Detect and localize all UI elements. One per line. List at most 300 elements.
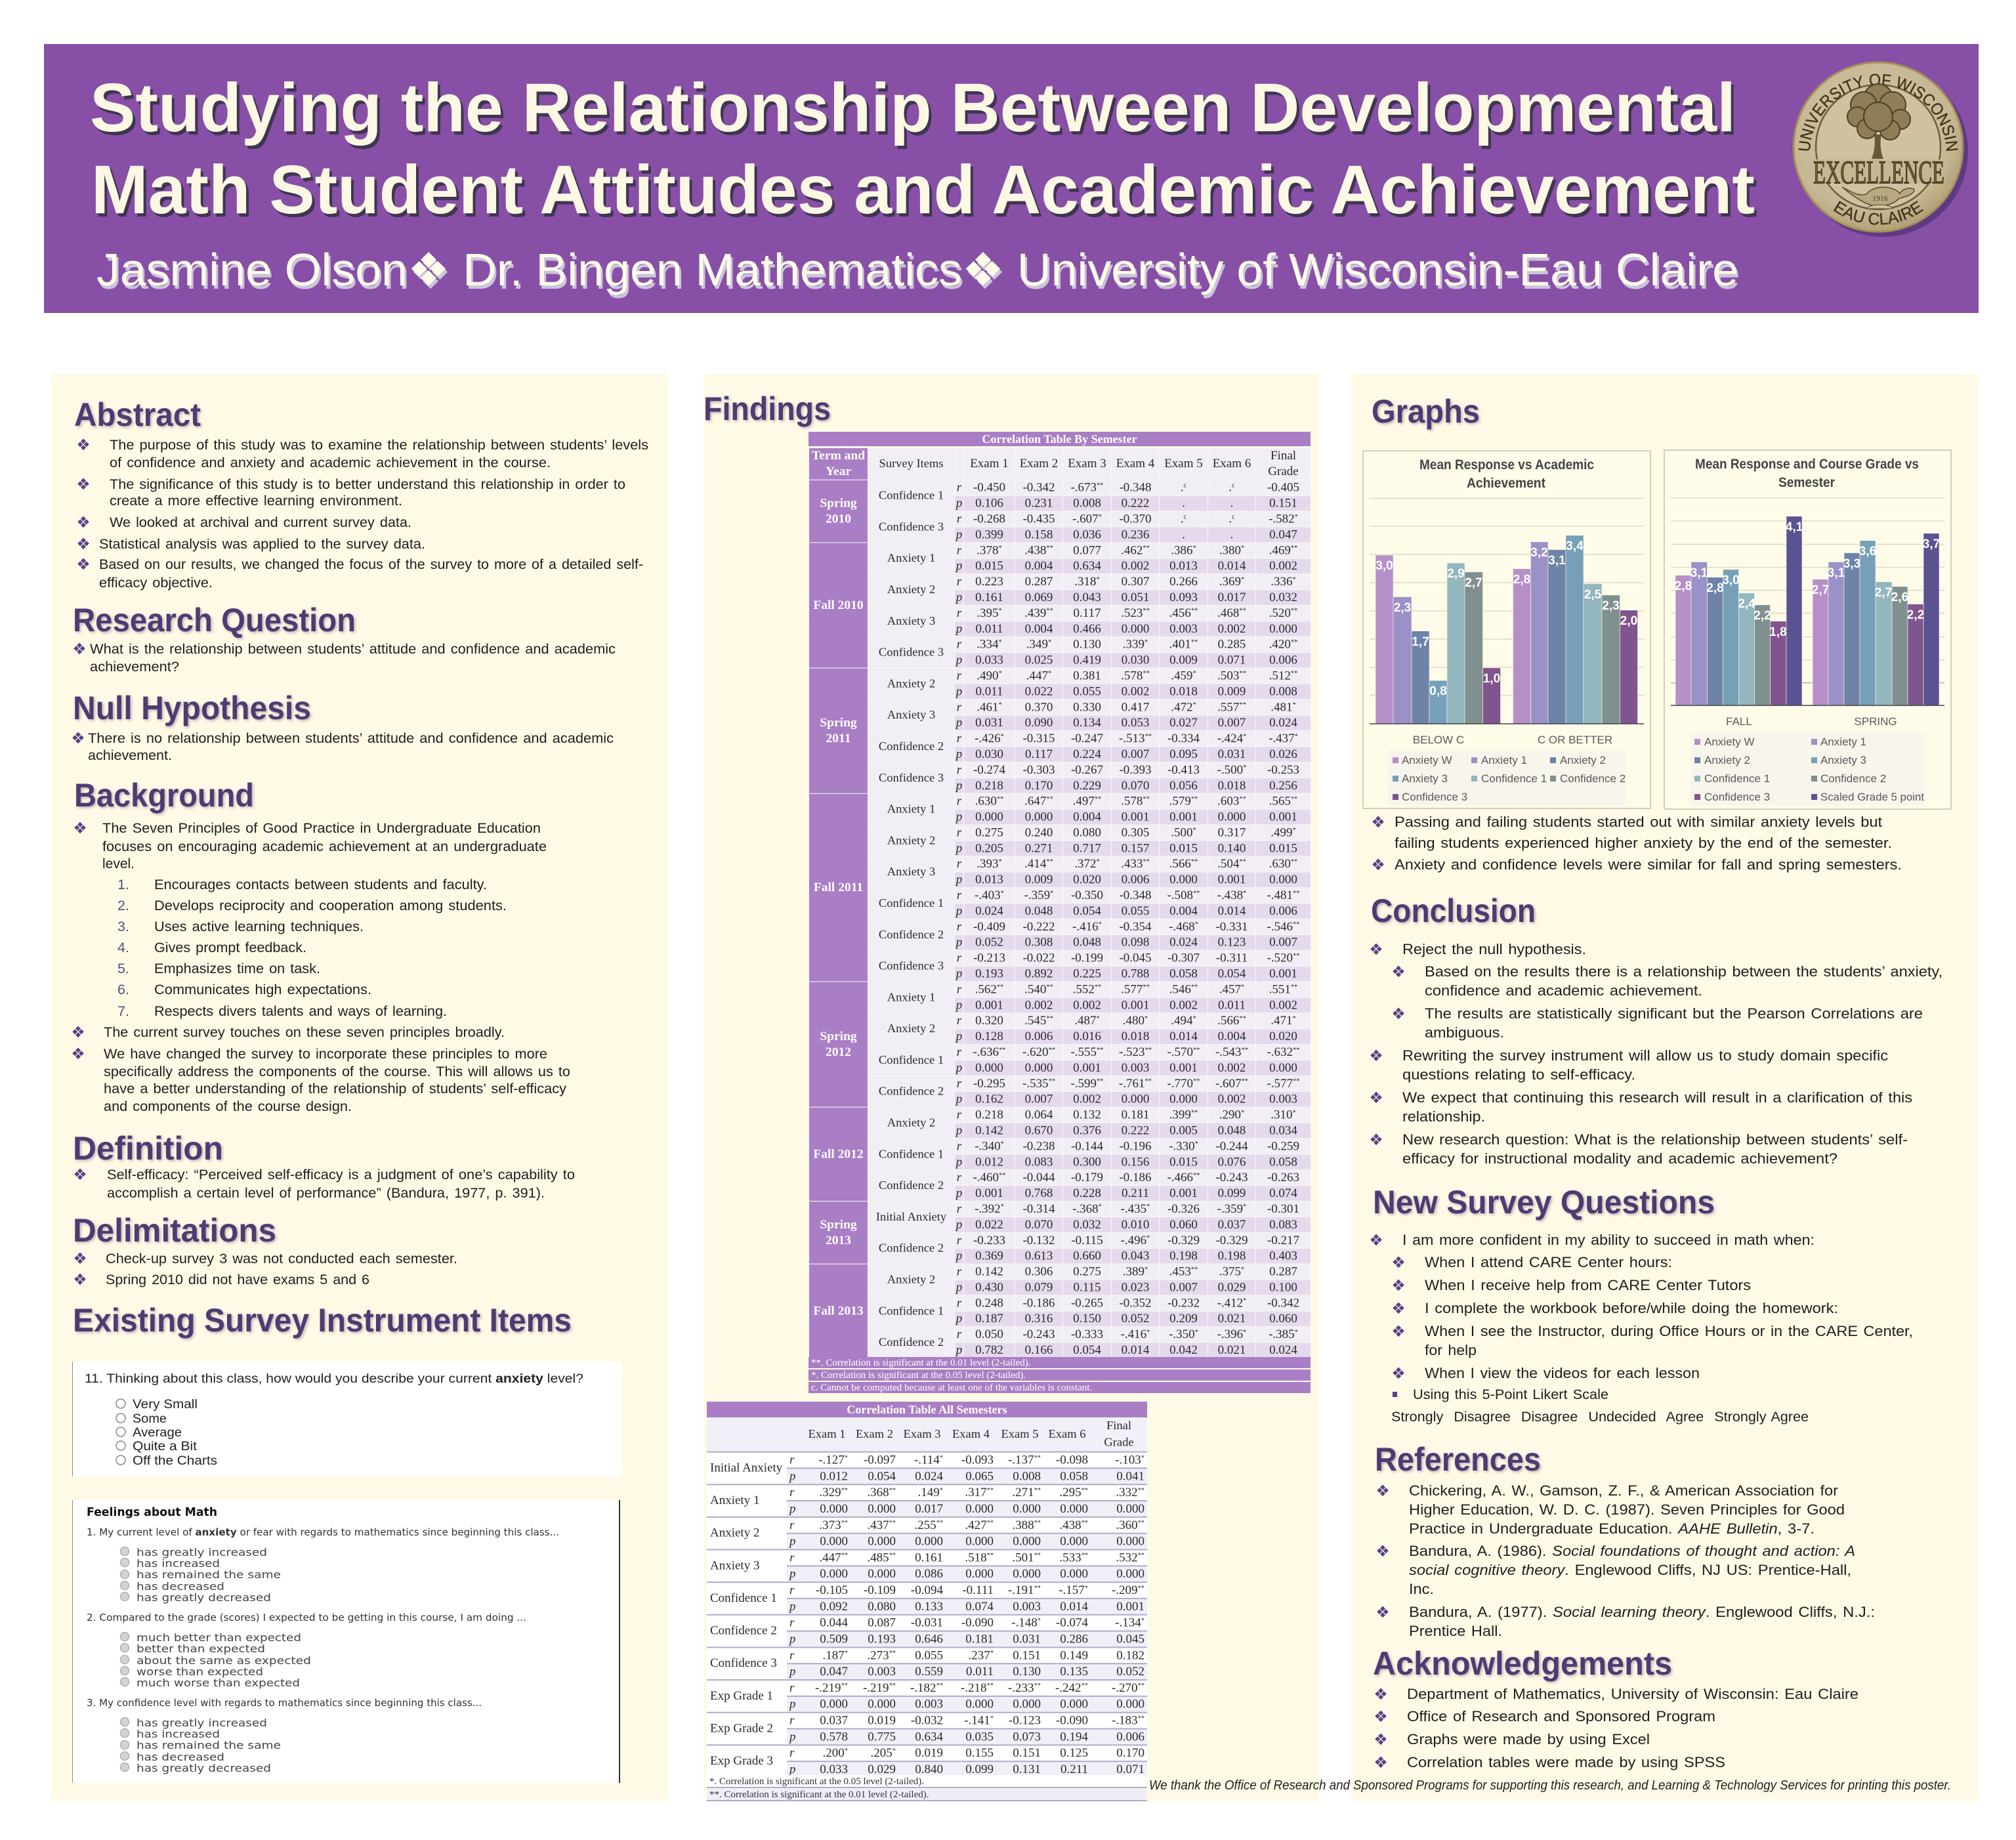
survey screenshot: anxiety question: Off the Charts xyxy=(133,1454,217,1468)
bar chart: mean response vs academic achievement: Mean Response vs Academic xyxy=(1419,457,1594,472)
rows: Spring 2012: -.543** xyxy=(1215,1045,1248,1058)
rows: Spring 2012: 0.000 xyxy=(1122,1092,1149,1106)
rows: Fall 2011: .497** xyxy=(1073,794,1101,808)
bar chart: mean response and course grade vs semester: 3,0 xyxy=(1722,574,1740,587)
correlation table all semesters: 0.151 xyxy=(1013,1746,1041,1760)
rows: Fall 2010: p xyxy=(956,559,962,573)
correlation table all semesters: r xyxy=(789,1486,794,1499)
rows: Spring 2010: .c xyxy=(1228,512,1235,526)
graph findings bullets: ❖ xyxy=(1371,813,1385,831)
table header row xyxy=(809,448,1311,480)
conclusion bullets: efficacy for instructional modality and academic achievement? xyxy=(1402,1150,1838,1167)
rows: Spring 2011: r xyxy=(957,700,961,714)
correlation table all semesters: -.191** xyxy=(1008,1583,1041,1597)
rows: Fall 2013: 0.142 xyxy=(975,1265,1003,1278)
abstract bullet list: The purpose of this study was to examine the relationship between students’ levels xyxy=(110,437,648,453)
rows: Fall 2010: 0.017 xyxy=(1218,591,1246,604)
abstract bullet list: ❖ xyxy=(76,513,91,532)
bar chart: mean response vs academic achievement: 2,0 xyxy=(1620,614,1637,628)
rows: Fall 2010: 0.002 xyxy=(1122,559,1149,573)
rows: Fall 2011: p xyxy=(956,810,962,824)
correlation table all semesters: 0.000 xyxy=(915,1534,943,1548)
rows: Spring 2012: p xyxy=(956,1060,962,1074)
rows: Fall 2012: .399** xyxy=(1169,1108,1198,1121)
rows: Spring 2012: 0.002 xyxy=(1073,998,1101,1012)
bar chart: mean response and course grade vs semester: 2,2 xyxy=(1907,608,1924,622)
correlation table all semesters: -0.094 xyxy=(911,1583,943,1597)
definition text: accomplish a certain level of performance” (Bandura, 1977, p. 391). xyxy=(107,1185,545,1201)
correlation table all semesters: 0.000 xyxy=(1116,1502,1144,1515)
rows: Spring 2012: Confidence 1 xyxy=(879,1054,944,1066)
correlation table all semesters: 0.000 xyxy=(868,1697,896,1711)
rows: Spring 2010: 0.008 xyxy=(1073,496,1101,510)
rows: Fall 2012: 0.228 xyxy=(1073,1186,1101,1200)
section: references xyxy=(1375,1441,1875,1639)
rows: Fall 2013: 0.042 xyxy=(1169,1343,1198,1357)
bar chart: mean response vs academic achievement: Anxiety W xyxy=(1402,754,1452,766)
bar chart: mean response and course grade vs semester: 3,1 xyxy=(1690,566,1708,580)
correlation table all semesters: 0.035 xyxy=(965,1730,994,1744)
rows: Fall 2011: r xyxy=(957,919,961,933)
rows: Fall 2013: 0.014 xyxy=(1122,1343,1149,1357)
survey screenshot: anxiety question: 11. Thinking about this class, how would you describe your current anxiety level? xyxy=(85,1372,583,1386)
rows: Spring 2011: 0.170 xyxy=(1025,778,1053,792)
rows: Spring 2012: 0.001 xyxy=(1169,1060,1198,1074)
rows: Fall 2011: p xyxy=(956,935,962,949)
rows: Fall 2010: r xyxy=(957,606,961,619)
rows: Spring 2012: -.535** xyxy=(1022,1076,1055,1090)
rows: Fall 2012: Fall 2012 xyxy=(813,1147,864,1161)
rows: Spring 2013: -0.301 xyxy=(1267,1202,1299,1215)
rows: Fall 2013: Anxiety 2 xyxy=(887,1273,935,1286)
rows: Fall 2011: 0.014 xyxy=(1218,904,1246,917)
rows: Fall 2011: 0.001 xyxy=(1122,810,1149,824)
bar chart: mean response and course grade vs semester: Anxiety 1 xyxy=(1820,736,1866,748)
rows: Spring 2011: .461* xyxy=(976,700,1002,714)
rows: Fall 2013: -0.265 xyxy=(1071,1296,1103,1310)
rows: Fall 2011: Confidence 3 xyxy=(879,959,944,972)
rows: Fall 2013: .375* xyxy=(1219,1265,1244,1278)
rows: Fall 2013: 0.050 xyxy=(975,1328,1003,1341)
rows: Spring 2013: 0.083 xyxy=(1269,1217,1297,1231)
rows: Spring 2012: 0.020 xyxy=(1269,1030,1297,1043)
rows: Fall 2010: .456** xyxy=(1169,606,1198,619)
rows: Fall 2010: 0.002 xyxy=(1269,559,1297,573)
correlation table all semesters: 0.000 xyxy=(1060,1534,1088,1548)
rows: Spring 2013: r xyxy=(957,1233,961,1247)
numbered list: seven principles: Develops reciprocity and cooperation among students. xyxy=(154,898,507,913)
rows: Fall 2010: .401** xyxy=(1169,637,1198,651)
rows: Fall 2010: 0.287 xyxy=(1025,575,1053,589)
correlation table all semesters: 0.006 xyxy=(1116,1730,1144,1744)
rows: Fall 2011: 0.193 xyxy=(975,967,1003,980)
rows: Spring 2011: 0.090 xyxy=(1025,716,1053,730)
correlation table all semesters: 0.000 xyxy=(820,1534,848,1548)
rows: Fall 2011: 0.054 xyxy=(1073,904,1101,917)
rows: Spring 2012: 0.004 xyxy=(1218,1030,1246,1043)
table header row: Year xyxy=(826,465,851,478)
rows: Fall 2011: 0.006 xyxy=(1269,904,1297,917)
abstract bullet list xyxy=(76,436,648,591)
rows: Fall 2010: 0.032 xyxy=(1269,591,1297,604)
rows: Spring 2011: 0.134 xyxy=(1073,716,1101,730)
survey question list: When I see the Instructor, during Office Hours or in the CARE Center, xyxy=(1425,1323,1913,1339)
rows: Fall 2011: Anxiety 3 xyxy=(887,866,935,879)
rows: Fall 2012: -0.263 xyxy=(1267,1171,1299,1184)
background closing bullets: ❖ xyxy=(71,1045,85,1063)
correlation table all semesters: 0.047 xyxy=(820,1665,848,1679)
rows: Fall 2011: -.508** xyxy=(1167,889,1200,902)
rows: Fall 2012: 0.083 xyxy=(1025,1155,1053,1169)
correlation table all semesters: -.137** xyxy=(1008,1453,1041,1467)
rows: Fall 2011: 0.317 xyxy=(1218,826,1246,839)
rows: Fall 2010: 0.004 xyxy=(1025,621,1053,635)
rows: Fall 2011: r xyxy=(957,826,961,839)
correlation table all semesters: .518** xyxy=(965,1551,994,1564)
rows: Spring 2013: -0.233 xyxy=(973,1233,1005,1247)
rows: Fall 2011: 0.000 xyxy=(1025,810,1053,824)
survey screenshot: feelings about math: has greatly decreased xyxy=(136,1591,271,1604)
correlation table all semesters: 0.086 xyxy=(915,1567,943,1581)
correlation table all semesters: 0.019 xyxy=(915,1746,943,1760)
rows: Fall 2013: 0.306 xyxy=(1025,1265,1053,1278)
conclusion bullets: ambiguous. xyxy=(1425,1024,1504,1041)
survey screenshot: anxiety question: Some xyxy=(133,1412,167,1426)
research question text xyxy=(72,640,616,675)
rows: Fall 2013: -0.243 xyxy=(1022,1328,1055,1341)
correlation table all semesters: 0.074 xyxy=(965,1599,994,1613)
survey question list: for help xyxy=(1425,1342,1477,1358)
rows: Fall 2011: .372* xyxy=(1074,857,1100,871)
table footnote: 0.05 significance xyxy=(808,1370,1311,1381)
graph findings bullets: failing students experienced higher anxiety by the end of the semester. xyxy=(1395,835,1892,851)
rows: Fall 2011: 0.140 xyxy=(1218,841,1246,855)
rows: Fall 2011: 0.048 xyxy=(1025,904,1053,917)
bar chart: mean response and course grade vs semester: Mean Response and Course Grade vs xyxy=(1695,457,1919,472)
rows: Fall 2013: p xyxy=(956,1280,962,1294)
correlation table all semesters: p xyxy=(789,1534,795,1548)
correlation table all semesters: 0.775 xyxy=(868,1730,896,1744)
numbered list: seven principles: 5. xyxy=(117,961,129,976)
rows: Fall 2013: -0.352 xyxy=(1119,1296,1152,1310)
rows: Fall 2012: 0.132 xyxy=(1073,1108,1101,1121)
correlation table all semesters: 0.155 xyxy=(965,1746,994,1760)
rows: Fall 2011: Confidence 1 xyxy=(879,897,944,910)
correlation table all semesters: p xyxy=(789,1763,795,1776)
correlation table all semesters: .273** xyxy=(867,1648,896,1662)
definition text xyxy=(73,1165,575,1201)
rows: Fall 2010: 0.071 xyxy=(1218,653,1246,667)
rows: Spring 2012: -.523** xyxy=(1119,1045,1152,1058)
correlation table all semesters: Anxiety 1 xyxy=(710,1494,759,1507)
correlation table all semesters: 0.000 xyxy=(1060,1567,1088,1581)
bar chart: mean response vs academic achievement: 3,4 xyxy=(1566,539,1584,553)
rows: Spring 2012: r xyxy=(957,1014,961,1028)
bar chart: mean response and course grade vs semester: Confidence 2 xyxy=(1820,772,1886,785)
bar chart: mean response and course grade vs semester: 3,7 xyxy=(1923,537,1940,551)
rows: Fall 2012: r xyxy=(957,1139,961,1153)
correlation table all semesters: 0.000 xyxy=(820,1697,848,1711)
delimitations text: ❖ xyxy=(73,1270,87,1289)
rows: Fall 2011: Anxiety 2 xyxy=(887,834,935,847)
rows: Fall 2011: -0.022 xyxy=(1022,951,1055,965)
bar chart: mean response vs academic achievement: Anxiety 3 xyxy=(1402,772,1448,785)
rows: Spring 2011: Anxiety 3 xyxy=(887,709,935,722)
rows: Spring 2013: -0.314 xyxy=(1022,1202,1055,1215)
bar chart: mean response vs academic achievement: Anxiety 1 xyxy=(1481,754,1527,766)
authors line: Jasmine Olson❖ Dr. Bingen Mathematics❖ University of Wisconsin-Eau Claire xyxy=(96,244,1738,295)
null hypothesis text: ❖ xyxy=(71,729,85,747)
rows: Spring 2012: 0.000 xyxy=(1269,1060,1297,1074)
conclusion bullets: We expect that continuing this research will result in a clarification of this xyxy=(1402,1089,1912,1106)
rows: Spring 2010: -0.268 xyxy=(973,512,1005,526)
survey screenshot: anxiety question: Average xyxy=(133,1426,182,1440)
rows: Spring 2010: -0.342 xyxy=(1022,480,1055,494)
background closing bullets: The current survey touches on these seven principles broadly. xyxy=(104,1024,505,1040)
correlation table all semesters: 0.000 xyxy=(820,1567,848,1581)
rows: Spring 2011: .557** xyxy=(1217,700,1246,714)
rows: Fall 2010: 0.015 xyxy=(975,559,1003,573)
bar chart: mean response and course grade vs semester: 2,8 xyxy=(1675,579,1692,593)
numbered list: seven principles: 2. xyxy=(117,898,129,913)
rows: Fall 2013: 0.021 xyxy=(1218,1312,1246,1326)
rows: Fall 2013: -0.186 xyxy=(1022,1296,1055,1310)
bar chart: mean response vs academic achievement: Confidence 3 xyxy=(1402,791,1467,803)
correlation table all semesters: .332** xyxy=(1116,1486,1144,1499)
correlation table all semesters: 0.131 xyxy=(1013,1763,1041,1776)
rows: Fall 2010: 0.117 xyxy=(1073,606,1101,619)
rows: Spring 2011: p xyxy=(956,684,962,698)
rows: Fall 2011: 0.000 xyxy=(1269,873,1297,887)
correlation table all semesters: .485** xyxy=(867,1551,896,1564)
rows: Fall 2013: r xyxy=(957,1328,961,1341)
rows: Spring 2010: 0.236 xyxy=(1122,528,1149,541)
bar chart: mean response and course grade vs semester: 4,1 xyxy=(1786,520,1803,534)
rows: Spring 2012: -.607** xyxy=(1215,1076,1248,1090)
abstract bullet list: ❖ xyxy=(76,555,91,574)
rows: Fall 2013: p xyxy=(956,1312,962,1326)
rows: Spring 2013: 2013 xyxy=(826,1233,851,1247)
correlation table all semesters: .317** xyxy=(965,1486,994,1499)
rows: Spring 2012: 0.001 xyxy=(975,998,1003,1012)
rows: Fall 2011: .647** xyxy=(1024,794,1053,808)
rows: Fall 2012: -0.238 xyxy=(1022,1139,1055,1153)
rows: Fall 2011: -.546** xyxy=(1267,919,1299,933)
lamp xyxy=(1842,187,1914,209)
rows: Fall 2011: .630** xyxy=(975,794,1003,808)
correlation table all semesters: 0.092 xyxy=(820,1599,848,1613)
rows: Fall 2011: 0.007 xyxy=(1269,935,1297,949)
acknowledgement list: Department of Mathematics, University of Wisconsin: Eau Claire xyxy=(1407,1686,1858,1702)
rows: Fall 2011: 0.098 xyxy=(1122,935,1149,949)
reference list: Practice in Undergraduate Education. AAHE Bulletin , 3-7. xyxy=(1409,1520,1815,1537)
rows: Fall 2012: 0.048 xyxy=(1218,1123,1246,1137)
bar chart: mean response and course grade vs semester xyxy=(1664,450,1951,809)
abstract bullet list: We looked at archival and current survey data. xyxy=(110,514,411,530)
rows: Fall 2012: 0.181 xyxy=(1122,1108,1149,1121)
rows: Spring 2012: -0.295 xyxy=(973,1076,1005,1090)
bar chart: mean response vs academic achievement: Confidence 2 xyxy=(1560,772,1626,785)
table header row: Final xyxy=(1270,449,1296,463)
correlation table all semesters: r xyxy=(789,1518,794,1532)
rows: Fall 2011: 0.000 xyxy=(1218,810,1246,824)
correlation table all semesters: .271** xyxy=(1012,1486,1041,1499)
correlation table all semesters: 0.000 xyxy=(1013,1567,1041,1581)
rows: Spring 2011: 0.070 xyxy=(1122,778,1149,792)
rows: Spring 2011: 0.011 xyxy=(975,684,1003,698)
rows: Fall 2012: 0.001 xyxy=(1169,1186,1198,1200)
correlation table all semesters: 0.211 xyxy=(1060,1763,1088,1776)
definition text: Self-efficacy: “Perceived self-efficacy is a judgment of one’s capability to xyxy=(107,1167,575,1182)
correlation table all semesters: 0.012 xyxy=(820,1469,848,1483)
rows: Fall 2012: 0.670 xyxy=(1025,1123,1053,1137)
rows: Fall 2011: 0.054 xyxy=(1218,967,1246,980)
rows: Spring 2013: Initial Anxiety xyxy=(876,1210,946,1223)
rows: Fall 2011: 0.006 xyxy=(1122,873,1149,887)
null hypothesis text: achievement. xyxy=(88,747,172,763)
rows: Spring 2011: .481* xyxy=(1270,700,1296,714)
rows: Spring 2011: 0.018 xyxy=(1169,684,1198,698)
rows: Fall 2012: 0.074 xyxy=(1269,1186,1297,1200)
icon: university seal: UNIVERSITY OF WISCONSIN xyxy=(1798,73,1958,151)
correlation table all semesters: -.148* xyxy=(1011,1616,1041,1629)
rows: Fall 2010: 0.000 xyxy=(1269,621,1297,635)
table header row xyxy=(707,1417,1147,1452)
rows: Fall 2011: .566** xyxy=(1169,857,1198,871)
rows: Spring 2011: 0.031 xyxy=(1218,747,1246,761)
rows: Fall 2010: .462** xyxy=(1121,543,1150,557)
survey question list: When I attend CARE Center hours: xyxy=(1425,1254,1672,1270)
rows: Fall 2011: r xyxy=(957,951,961,965)
table header row: Exam 6 xyxy=(1213,457,1251,470)
rows: Spring 2013: 0.198 xyxy=(1169,1249,1198,1263)
rows: Fall 2011: 0.240 xyxy=(1025,826,1053,839)
rows: Fall 2010: r xyxy=(957,575,961,589)
rows: Fall 2011: -0.354 xyxy=(1119,919,1152,933)
reference list: ❖ xyxy=(1376,1603,1390,1621)
correlation table all semesters: .329** xyxy=(819,1486,848,1499)
table header row: Exam 1 xyxy=(970,457,1009,470)
survey screenshot: feelings about math: much better than expected xyxy=(136,1631,301,1644)
rows: Spring 2011: .490* xyxy=(976,669,1002,682)
rows: Fall 2012: -0.244 xyxy=(1215,1139,1248,1153)
rows: Fall 2010: Fall 2010 xyxy=(813,598,864,612)
rows: Fall 2011: 0.001 xyxy=(1218,873,1246,887)
reference list: Prentice Hall. xyxy=(1409,1623,1502,1639)
rows: Fall 2011: Fall 2011 xyxy=(814,881,863,894)
rows: Spring 2011: .459* xyxy=(1171,669,1196,682)
rows: Spring 2012: 0.002 xyxy=(1218,1060,1246,1074)
rows: Fall 2013: 0.007 xyxy=(1169,1280,1198,1294)
rows: Fall 2010: 0.130 xyxy=(1073,637,1101,651)
survey question list: ❖ xyxy=(1391,1322,1406,1341)
background closing bullets: ❖ xyxy=(71,1023,85,1041)
bar chart: mean response and course grade vs semester: 3,1 xyxy=(1828,566,1845,580)
rows: Spring 2010: 0.158 xyxy=(1025,528,1053,541)
rows: Fall 2011: -.481** xyxy=(1267,889,1299,902)
section: acknowledgements xyxy=(1373,1645,1858,1772)
correlation table all semesters: Anxiety 3 xyxy=(710,1558,759,1572)
rows: Fall 2011: .500* xyxy=(1171,826,1196,839)
bar chart: mean response vs academic achievement: 2,5 xyxy=(1584,588,1602,602)
rows: Fall 2011: 0.015 xyxy=(1169,841,1198,855)
icon: university seal: EAU CLAIRE xyxy=(1834,201,1923,225)
correlation table all semesters: -0.098 xyxy=(1056,1453,1088,1467)
rows: Spring 2013: 0.660 xyxy=(1073,1249,1101,1263)
correlation table all semesters: -0.031 xyxy=(911,1616,943,1629)
rows: Spring 2012: 0.000 xyxy=(1025,1060,1053,1074)
delimitations text: ❖ xyxy=(73,1249,87,1268)
correlation table all semesters: -0.111 xyxy=(962,1583,994,1597)
rows: Spring 2011: -0.315 xyxy=(1022,732,1055,745)
abstract bullet list: Statistical analysis was applied to the survey data. xyxy=(99,536,425,552)
abstract bullet list: Based on our results, we changed the focus of the survey to more of a detailed self- xyxy=(99,556,643,572)
rows: Spring 2010: 0.222 xyxy=(1122,496,1149,510)
rows: Fall 2013: 0.150 xyxy=(1073,1312,1101,1326)
rows: Fall 2013: r xyxy=(957,1296,961,1310)
rows: Spring 2013: -.359* xyxy=(1217,1202,1246,1215)
abstract bullet list: ❖ xyxy=(76,436,91,454)
rows: Spring 2013: 0.022 xyxy=(975,1217,1003,1231)
rows: Fall 2010: r xyxy=(957,543,961,557)
rows: Spring 2010: 0.151 xyxy=(1269,496,1297,510)
correlation table all semesters: -.127* xyxy=(818,1453,848,1467)
rows: Spring 2012: .552** xyxy=(1073,982,1101,996)
rows: Spring 2012: 0.016 xyxy=(1073,1030,1101,1043)
rows: Spring 2011: Confidence 2 xyxy=(879,740,944,753)
rows: Fall 2010: r xyxy=(957,637,961,651)
rows: Spring 2011: 0.024 xyxy=(1269,716,1297,730)
rows: Spring 2011: 0.381 xyxy=(1073,669,1101,682)
conclusion bullets: ❖ xyxy=(1369,1047,1383,1065)
rows: Spring 2011: 0.007 xyxy=(1218,716,1246,730)
rows: Fall 2013: 0.187 xyxy=(975,1312,1003,1326)
correlation table all semesters: p xyxy=(789,1469,795,1483)
rows: Spring 2013: -0.132 xyxy=(1022,1233,1055,1247)
panel: findings column xyxy=(704,374,1319,1801)
rows: Spring 2013: -0.115 xyxy=(1071,1233,1103,1247)
rows: Fall 2012: 0.222 xyxy=(1122,1123,1149,1137)
survey question list: I am more confident in my ability to succeed in math when: xyxy=(1402,1232,1815,1248)
rows: Fall 2011: 0.013 xyxy=(975,873,1003,887)
bar chart: mean response and course grade vs semester: Scaled Grade 5 point xyxy=(1820,791,1924,803)
numbered list: seven principles: 6. xyxy=(117,982,129,997)
rows: Spring 2010: .c xyxy=(1181,512,1186,526)
rows: Fall 2011: .393* xyxy=(976,857,1002,871)
background closing bullets: specifically address the components of the course. This will allows us to xyxy=(104,1064,570,1079)
rows: Spring 2013: 0.613 xyxy=(1025,1249,1053,1263)
rows: Spring 2012: 0.002 xyxy=(1218,1092,1246,1106)
table header row: Exam 4 xyxy=(952,1428,990,1441)
rows: Spring 2010: -0.348 xyxy=(1119,480,1152,494)
correlation table all semesters: Exp Grade 1 xyxy=(710,1689,773,1703)
rows: Fall 2013: -.350* xyxy=(1169,1328,1198,1341)
rows: Fall 2012: Confidence 2 xyxy=(879,1179,944,1192)
correlation table all semesters: 0.052 xyxy=(1116,1665,1144,1679)
rows: Spring 2013: Confidence 2 xyxy=(879,1242,944,1255)
bar chart: mean response vs academic achievement: 1,7 xyxy=(1412,635,1429,649)
rows: Fall 2011: -0.045 xyxy=(1119,951,1152,965)
rows: Fall 2010: .438** xyxy=(1024,543,1053,557)
numbered list: seven principles: Gives prompt feedback. xyxy=(154,940,306,955)
rows: Fall 2011: 0.055 xyxy=(1122,904,1149,917)
rows: Spring 2011: 0.095 xyxy=(1169,747,1198,761)
bar chart: mean response vs academic achievement: 2,9 xyxy=(1447,567,1465,581)
rows: Fall 2011: 0.058 xyxy=(1169,967,1198,980)
correlation table all semesters: 0.135 xyxy=(1060,1665,1088,1679)
rows: Spring 2012: .457* xyxy=(1219,982,1244,996)
table header row: Survey Items xyxy=(879,457,944,470)
